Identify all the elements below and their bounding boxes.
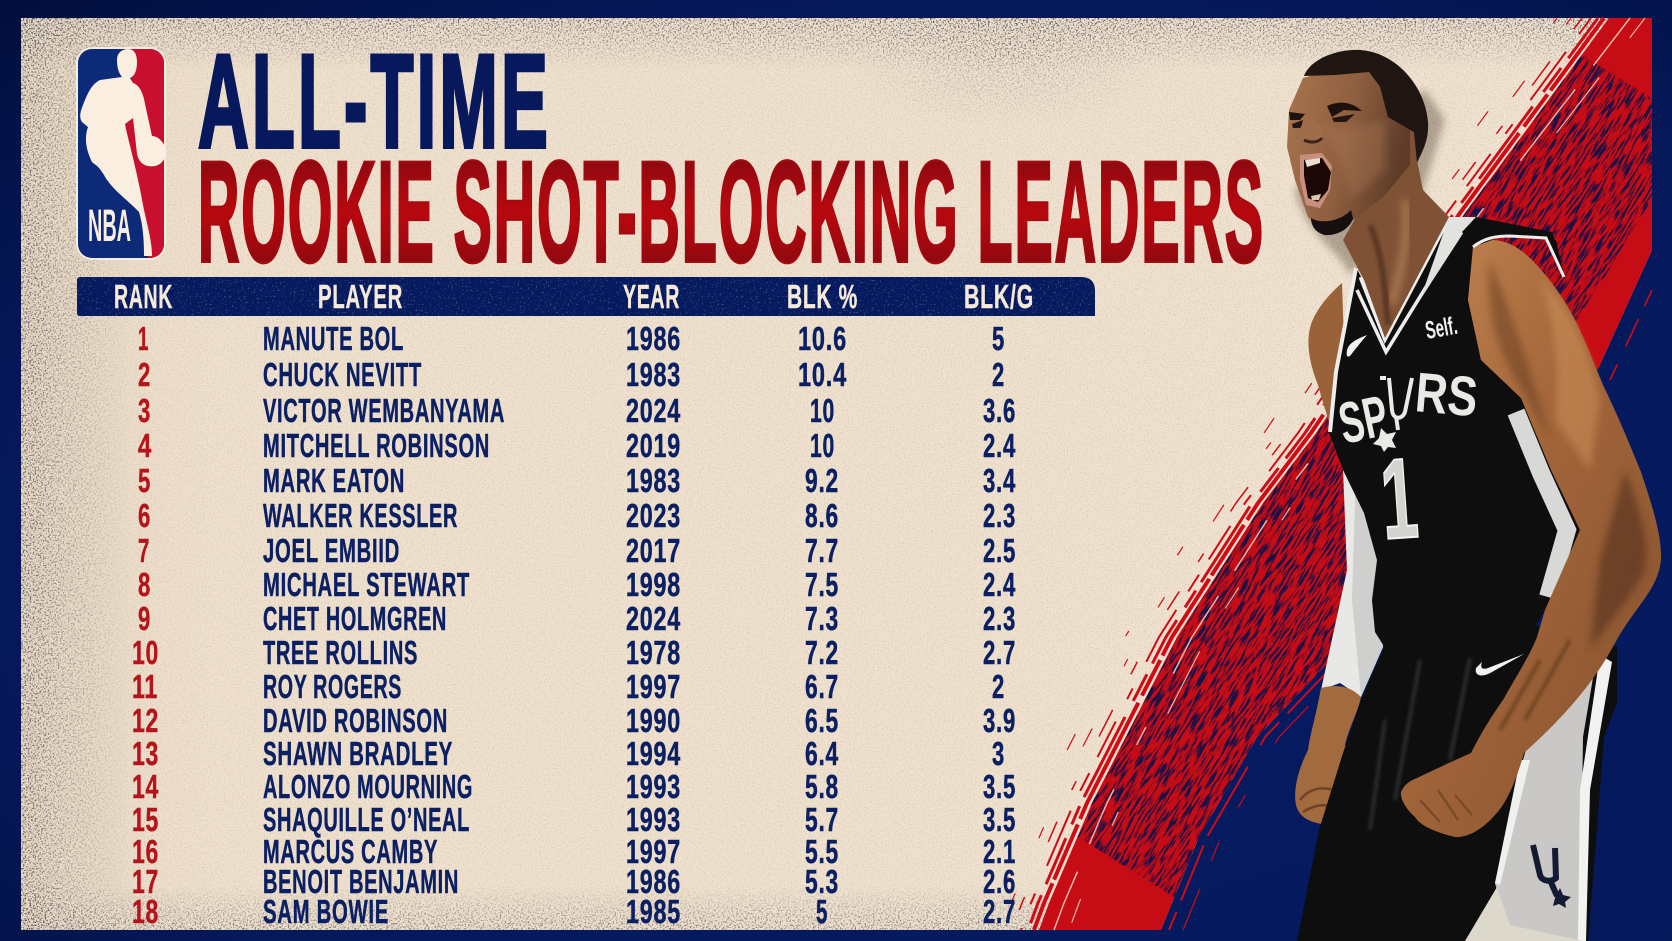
row 6: 6 bbox=[138, 497, 151, 534]
head bbox=[1287, 50, 1428, 235]
row 10: TREE ROLLINS bbox=[263, 634, 418, 671]
row 8: 2.4 bbox=[983, 566, 1016, 603]
row 16: 2.1 bbox=[983, 833, 1016, 870]
row 8: 1998 bbox=[626, 566, 681, 603]
shorts swoosh bbox=[1476, 654, 1524, 675]
row 18: SAM BOWIE bbox=[263, 893, 389, 930]
shorts bbox=[1297, 625, 1617, 941]
row 15: 1993 bbox=[626, 801, 681, 838]
row 17: 2.6 bbox=[983, 863, 1016, 900]
row 5: 9.2 bbox=[805, 462, 839, 499]
row 7 bbox=[138, 532, 1016, 569]
row 6: 2.3 bbox=[983, 497, 1016, 534]
row 5: MARK EATON bbox=[263, 462, 405, 499]
row 17: 17 bbox=[132, 863, 159, 900]
row 14 bbox=[132, 768, 1016, 805]
right arm bbox=[1401, 240, 1661, 837]
row 4: 2019 bbox=[626, 427, 681, 464]
row 9: 7.3 bbox=[805, 600, 839, 637]
row 6: 2023 bbox=[626, 497, 681, 534]
row 1: 5 bbox=[992, 320, 1005, 357]
row 8: MICHAEL STEWART bbox=[263, 566, 470, 603]
row 7: 7 bbox=[138, 532, 150, 569]
row 7: JOEL EMBIID bbox=[263, 532, 400, 569]
row 9: CHET HOLMGREN bbox=[263, 600, 447, 637]
face bbox=[1287, 70, 1410, 235]
row 18 bbox=[132, 893, 1016, 930]
table bbox=[77, 277, 1095, 930]
row 10 bbox=[132, 634, 1016, 671]
row 9: 2024 bbox=[626, 600, 681, 637]
row 1: 1986 bbox=[626, 320, 681, 357]
row 12: 6.5 bbox=[805, 702, 839, 739]
row 14: 1993 bbox=[626, 768, 681, 805]
row 9: 9 bbox=[138, 600, 151, 637]
row 3: 2024 bbox=[626, 392, 681, 429]
row 3: 10 bbox=[810, 392, 835, 429]
row 2: 10.4 bbox=[798, 356, 847, 393]
row 13 bbox=[132, 735, 1005, 772]
row 11: 6.7 bbox=[805, 668, 839, 705]
row 8 bbox=[138, 566, 1016, 603]
hair bbox=[1304, 50, 1428, 163]
row 7: 2017 bbox=[626, 532, 681, 569]
team name: SP bbox=[1333, 383, 1394, 457]
shorts side panel bbox=[1495, 660, 1596, 941]
row 14: 14 bbox=[132, 768, 159, 805]
row 3 bbox=[138, 392, 1016, 429]
neck bbox=[1343, 145, 1449, 338]
jersey shoulder flap bbox=[1462, 217, 1566, 280]
row 18: 18 bbox=[132, 893, 159, 930]
row 17: 1986 bbox=[626, 863, 681, 900]
row 10: 7.2 bbox=[805, 634, 839, 671]
row 16 bbox=[132, 833, 1016, 870]
row 7: 2.5 bbox=[983, 532, 1016, 569]
row 11: 2 bbox=[992, 668, 1005, 705]
row 14: ALONZO MOURNING bbox=[263, 768, 473, 805]
row 15: SHAQUILLE O’NEAL bbox=[263, 801, 470, 838]
row 4: 10 bbox=[810, 427, 835, 464]
player shadow bbox=[1295, 90, 1445, 275]
row 3: 3 bbox=[138, 392, 151, 429]
row 12: 1990 bbox=[626, 702, 681, 739]
row 18: 1985 bbox=[626, 893, 681, 930]
row 3: VICTOR WEMBANYAMA bbox=[263, 392, 505, 429]
table header bar: BLK % bbox=[787, 278, 858, 315]
icon: spurs logo on shorts bbox=[1533, 845, 1571, 908]
row 12: DAVID ROBINSON bbox=[263, 702, 448, 739]
row 16: MARCUS CAMBY bbox=[263, 833, 438, 870]
beard bbox=[1311, 210, 1353, 235]
jersey trim bbox=[1330, 217, 1567, 597]
row 4 bbox=[138, 427, 1016, 464]
row 7: 7.7 bbox=[805, 532, 839, 569]
row 13: 3 bbox=[992, 735, 1005, 772]
row 6: WALKER KESSLER bbox=[263, 497, 458, 534]
logo silhouette bbox=[80, 49, 166, 256]
row 10: 2.7 bbox=[983, 634, 1016, 671]
row 11 bbox=[132, 668, 1005, 705]
row 15: 5.7 bbox=[805, 801, 839, 838]
player figure bbox=[1287, 50, 1661, 941]
row 4: 2.4 bbox=[983, 427, 1016, 464]
row 16: 1997 bbox=[626, 833, 681, 870]
table header bar: RANK bbox=[114, 278, 173, 315]
row 4: MITCHELL ROBINSON bbox=[263, 427, 490, 464]
jersey bbox=[1329, 217, 1580, 648]
row 12: 12 bbox=[132, 702, 159, 739]
row 13: SHAWN BRADLEY bbox=[263, 735, 453, 772]
row 6: 8.6 bbox=[805, 497, 839, 534]
row 2: CHUCK NEVITT bbox=[263, 356, 422, 393]
logo red half bbox=[125, 49, 164, 258]
row 16: 16 bbox=[132, 833, 159, 870]
row 12: 3.9 bbox=[983, 702, 1016, 739]
row 5: 5 bbox=[138, 462, 151, 499]
row 12 bbox=[132, 702, 1016, 739]
table header bar bbox=[77, 277, 1095, 316]
open mouth bbox=[1300, 153, 1332, 208]
row 11: 11 bbox=[132, 668, 158, 705]
row 13: 6.4 bbox=[805, 735, 839, 772]
table header bar: PLAYER bbox=[318, 278, 403, 315]
left arm and sleeve bbox=[1295, 283, 1383, 824]
jersey swoosh bbox=[1347, 335, 1367, 357]
nose bbox=[1296, 118, 1323, 144]
row 9 bbox=[138, 600, 1016, 637]
title line 1: ALL-TIME bbox=[198, 28, 551, 176]
row 4: 4 bbox=[138, 427, 152, 464]
row 13: 13 bbox=[132, 735, 159, 772]
row 15 bbox=[132, 801, 1016, 838]
jersey number: 1 bbox=[1377, 435, 1422, 564]
row 8: 8 bbox=[138, 566, 151, 603]
red and navy brush slash bbox=[987, 18, 1672, 930]
team name: RS bbox=[1413, 360, 1480, 428]
row 17: 5.3 bbox=[805, 863, 839, 900]
row 6 bbox=[138, 497, 1016, 534]
row 10: 10 bbox=[132, 634, 159, 671]
row 1 bbox=[138, 320, 1005, 357]
icon: NBA logo bbox=[76, 47, 166, 260]
table header bar: BLK/G bbox=[964, 278, 1034, 315]
row 5 bbox=[138, 462, 1016, 499]
row 18: 2.7 bbox=[983, 893, 1016, 930]
row 18: 5 bbox=[816, 893, 828, 930]
icon: NBA logo: NBA bbox=[88, 200, 131, 251]
row 14: 3.5 bbox=[983, 768, 1016, 805]
row 17 bbox=[132, 863, 1016, 900]
row 5: 3.4 bbox=[983, 462, 1016, 499]
row 9: 2.3 bbox=[983, 600, 1016, 637]
row 2: 2 bbox=[138, 356, 151, 393]
row 16: 5.5 bbox=[805, 833, 839, 870]
brows and eyes bbox=[1327, 103, 1362, 117]
row 17: BENOIT BENJAMIN bbox=[263, 863, 459, 900]
row 1: 1 bbox=[138, 320, 149, 357]
row 15: 3.5 bbox=[983, 801, 1016, 838]
row 1: 10.6 bbox=[798, 320, 847, 357]
table header bar: YEAR bbox=[623, 278, 680, 315]
row 3: 3.6 bbox=[983, 392, 1016, 429]
team name bbox=[1333, 360, 1480, 457]
row 8: 7.5 bbox=[805, 566, 839, 603]
row 2: 2 bbox=[992, 356, 1005, 393]
row 2 bbox=[138, 356, 1005, 393]
ear bbox=[1407, 128, 1423, 162]
row 13: 1994 bbox=[626, 735, 681, 772]
title bbox=[198, 28, 1265, 292]
row 1: MANUTE BOL bbox=[263, 320, 404, 357]
sponsor: Self. bbox=[1423, 312, 1460, 345]
row 15: 15 bbox=[132, 801, 159, 838]
row 14: 5.8 bbox=[805, 768, 839, 805]
row 10: 1978 bbox=[626, 634, 681, 671]
row 11: 1997 bbox=[626, 668, 681, 705]
row 2: 1983 bbox=[626, 356, 681, 393]
row 5: 1983 bbox=[626, 462, 681, 499]
row 11: ROY ROGERS bbox=[263, 668, 402, 705]
